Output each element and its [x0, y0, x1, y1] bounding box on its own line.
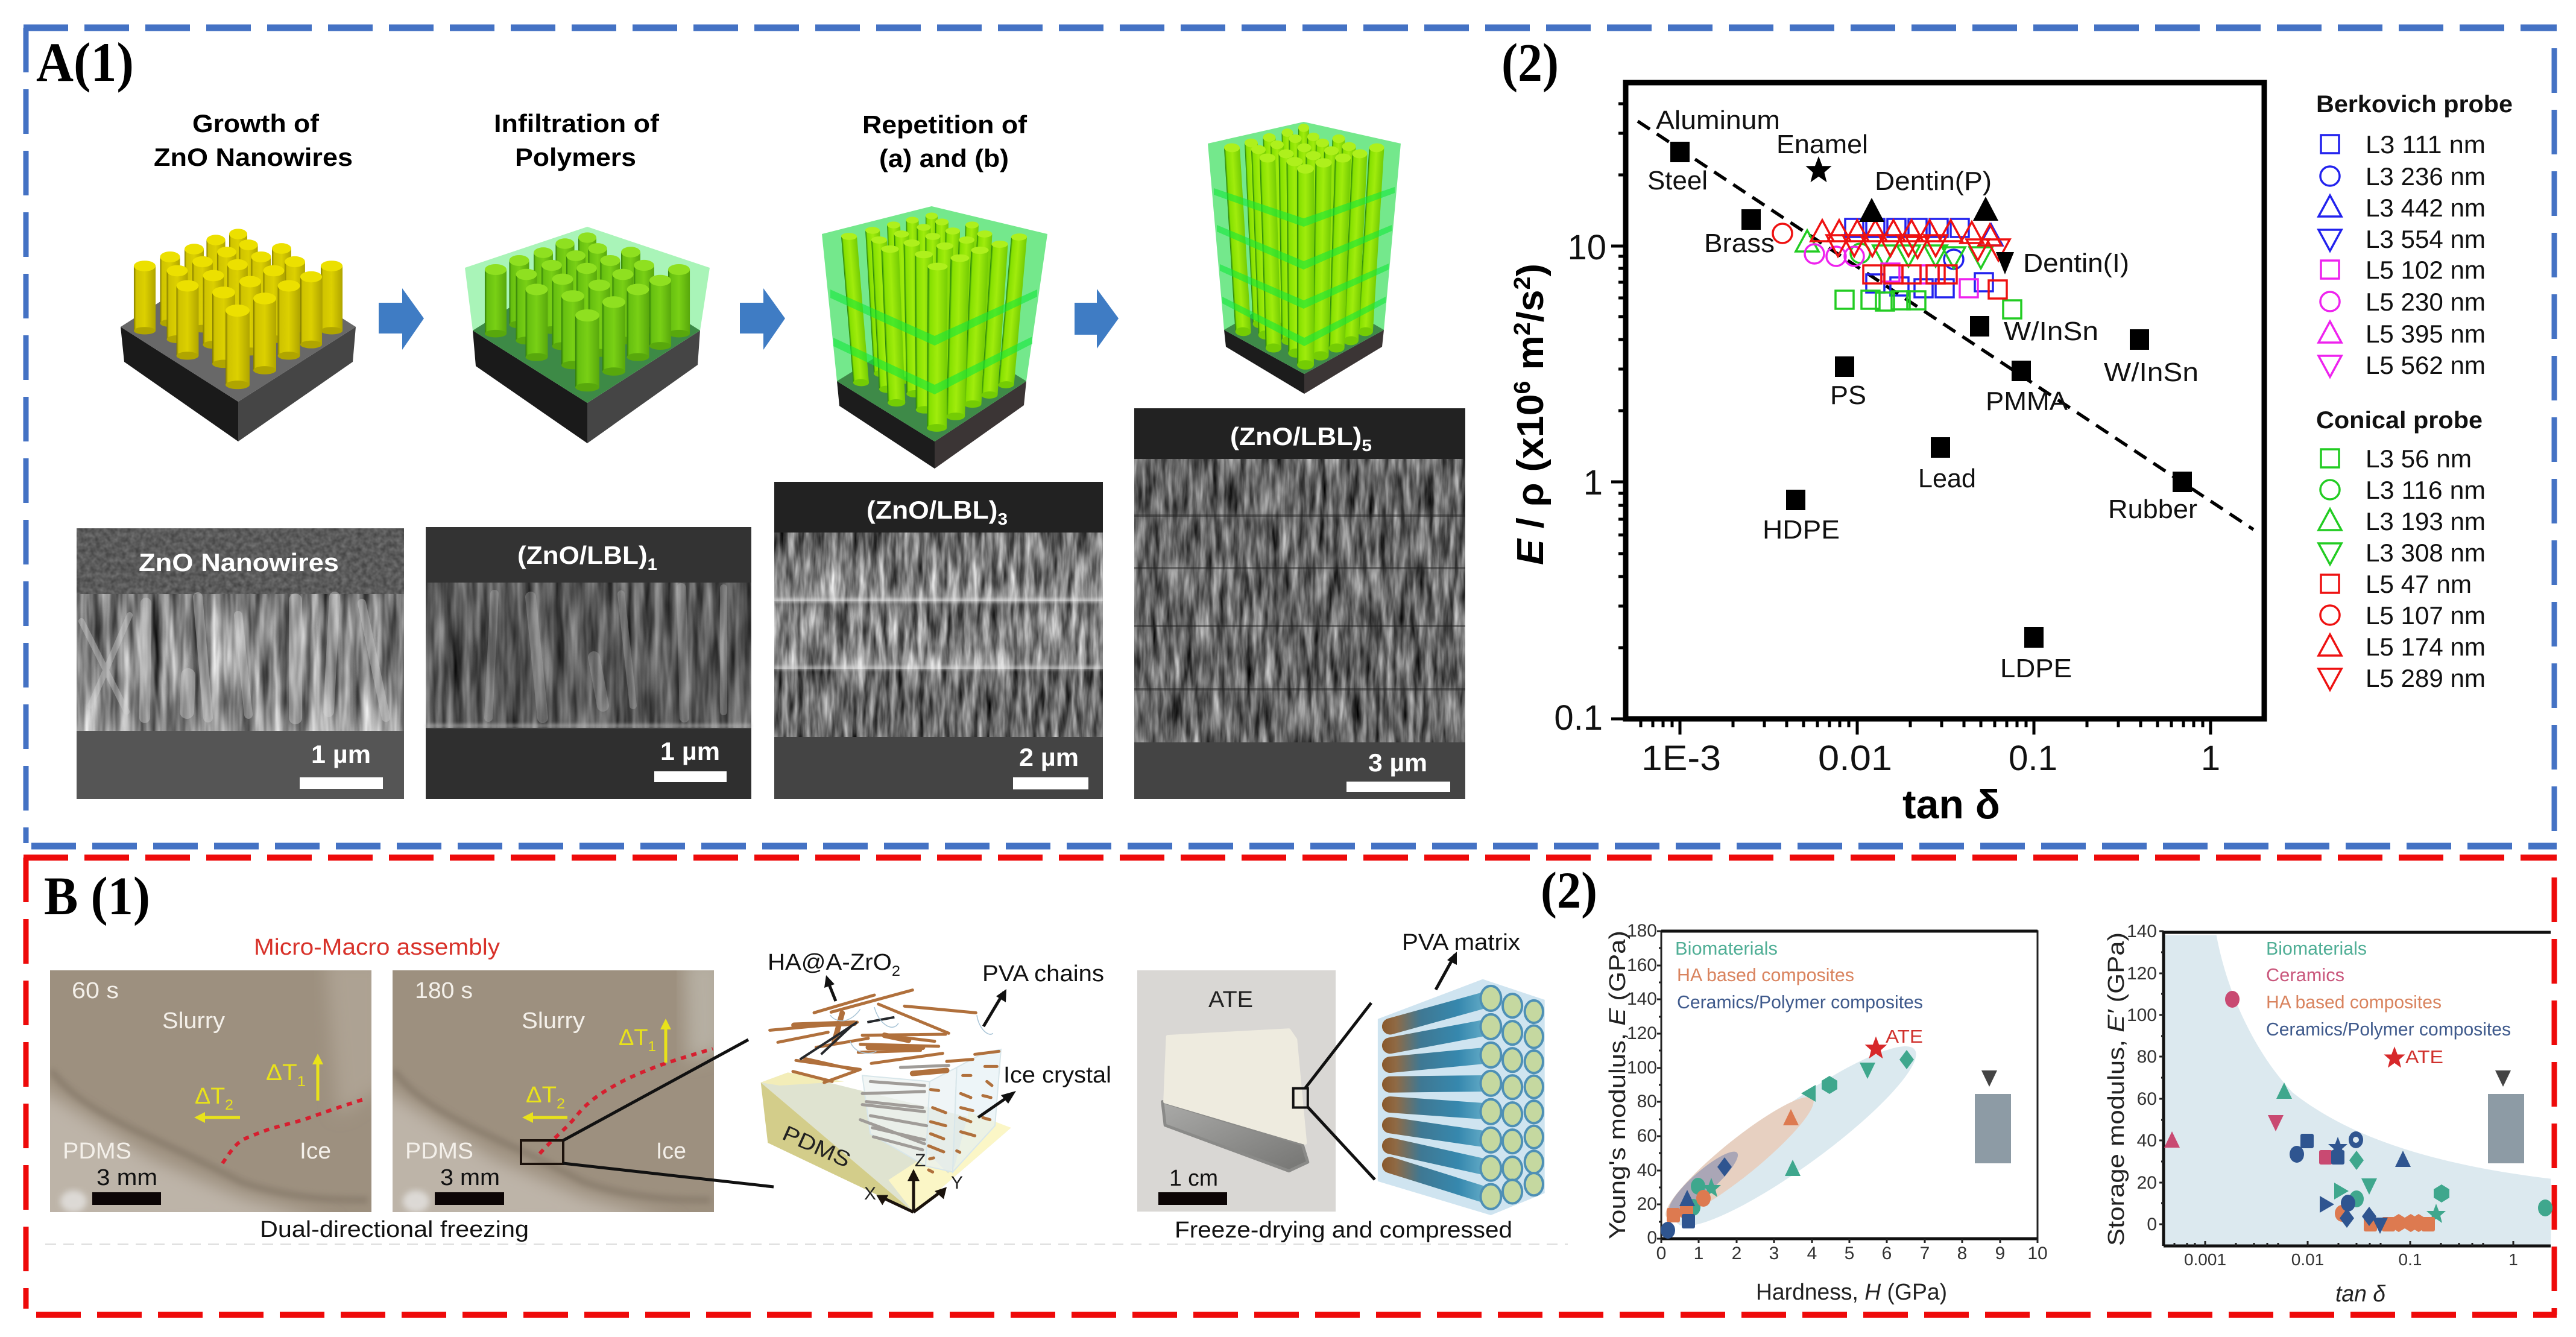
tick labels: 0.1	[2399, 1250, 2422, 1269]
temperature gradient arrows	[522, 1019, 671, 1123]
axis tick labels: 1	[1583, 463, 1603, 502]
tick labels: 7	[1920, 1244, 1930, 1263]
legend: probes: L3 442 nm	[2366, 194, 2486, 222]
legend: probes: L3 56 nm	[2366, 444, 2472, 473]
caption: Dual-directional freezing: Dual-directional freezing	[260, 1217, 529, 1242]
data labels: Enamel	[1776, 130, 1868, 159]
heading: repetition step: (a) and (b)	[879, 144, 1009, 172]
heading: infiltration step: Polymers	[515, 143, 636, 171]
temperature gradient arrows: ΔT	[619, 1025, 648, 1051]
SEM label: (ZnO/LBL)1: 1	[648, 555, 657, 574]
axis tick labels: 0.1	[2009, 739, 2057, 778]
data: reference materials	[1670, 142, 2192, 648]
tick labels: 80	[1637, 1092, 1657, 1111]
red dotted ice front	[223, 1098, 367, 1163]
markers	[2164, 991, 2552, 1234]
scale bar	[1346, 782, 1450, 792]
axis labels: Z	[915, 1151, 926, 1171]
y axis title: )	[1510, 264, 1552, 276]
tick labels: 120	[2127, 964, 2157, 984]
red dotted ice front	[540, 1049, 713, 1154]
scale bar	[654, 771, 727, 782]
legend: Biomaterials	[1675, 938, 1778, 959]
scale: 3 mm	[435, 1165, 504, 1205]
tick labels: 100	[2127, 1005, 2157, 1025]
y axis title: 6	[1510, 381, 1535, 394]
cube: three layers	[822, 206, 1047, 469]
photo labels: PDMS	[405, 1139, 473, 1164]
legend: Ceramics/Polymer composites	[1677, 991, 1923, 1013]
scale label: 1 µm: 1 µm	[311, 740, 371, 768]
callout: HA@A-ZrO2: 2	[892, 963, 900, 979]
axis labels	[864, 1151, 963, 1204]
SEM panel: (ZnO/LBL)3	[774, 482, 1103, 799]
photo labels	[63, 978, 331, 1164]
scale: 3 mm	[92, 1165, 161, 1205]
x axis title: tan δ	[1902, 782, 2000, 827]
tick labels: 20	[1637, 1194, 1657, 1214]
x axis title: Hardness, H (GPa)	[1756, 1280, 1947, 1305]
label: B (1): B (1)	[44, 867, 150, 926]
data labels: Aluminum	[1656, 106, 1780, 135]
y axis title: 2	[1510, 322, 1535, 335]
photo labels: PDMS	[63, 1139, 131, 1164]
label: (2) panel A: (2)	[1501, 33, 1559, 93]
panel frame: B	[24, 858, 2557, 1315]
photo labels: Ice	[656, 1139, 686, 1164]
trend line	[1638, 121, 2253, 529]
schematic: PDMS wedge with rods and ice crystals	[761, 990, 1011, 1212]
legend: probes	[2316, 91, 2513, 692]
callout: PVA matrix: PVA matrix	[1402, 930, 1520, 955]
legend: probes: L3 193 nm	[2366, 507, 2486, 536]
tick labels: 140	[1627, 989, 1657, 1009]
SEM panel: ZnO nanowires	[77, 528, 404, 799]
callout: Ice crystal: Ice crystal	[1003, 1063, 1111, 1088]
arrow: step 1 to 2	[379, 288, 424, 350]
temperature gradient arrows: ΔT	[266, 1060, 295, 1086]
photo: ATE sample	[1137, 970, 1336, 1212]
icon: indenter on pillar	[1975, 1070, 2011, 1163]
legend: HA based composites	[2266, 991, 2442, 1013]
cube: polymer infiltrated	[465, 227, 710, 443]
legend: Biomaterials	[2266, 938, 2367, 959]
y axis title: E / ρ (x10	[1510, 400, 1552, 565]
callout: PVA chains	[982, 961, 1104, 1026]
legend: HA based composites	[1677, 964, 1854, 985]
SEM panel: (ZnO/LBL)1	[426, 527, 751, 799]
y axis title: m	[1510, 335, 1552, 381]
scale: 3 mm: 3 mm	[96, 1165, 157, 1190]
callout: Ice crystal	[978, 1063, 1111, 1117]
data: Berkovich and conical probes cluster	[1773, 219, 2021, 318]
axis tick labels: 1E-3	[1641, 739, 1721, 778]
tick labels: 100	[1627, 1058, 1657, 1078]
legend	[1675, 938, 1923, 1047]
legend: probes: L3 236 nm	[2366, 162, 2486, 191]
tick labels: 3	[1769, 1244, 1779, 1263]
legend: probes: L3 111 nm	[2366, 130, 2486, 159]
legend: probes: L3 554 nm	[2366, 225, 2486, 253]
tick labels: 120	[1627, 1023, 1657, 1043]
chart: E/rho vs tan delta	[1510, 83, 2264, 827]
axis tick labels	[1554, 228, 2220, 778]
regions	[1655, 1025, 1933, 1247]
tick labels: 9	[1995, 1244, 2005, 1263]
callout: PVA chains: PVA chains	[982, 961, 1104, 987]
data labels: PMMA	[1986, 387, 2068, 416]
photo labels: 60 s	[72, 978, 119, 1004]
tick labels: 8	[1957, 1244, 1967, 1263]
label: (2) panel B: (2)	[1541, 861, 1597, 919]
panel frame: A	[24, 28, 2557, 846]
arrow: step 3 to 4	[1075, 289, 1119, 349]
tick labels: 80	[2137, 1047, 2157, 1067]
scale: 3 mm: 3 mm	[440, 1165, 500, 1190]
temperature gradient arrows: 1	[648, 1038, 656, 1055]
photo: 60 s freezing	[24, 959, 386, 1230]
data labels: PS	[1830, 381, 1866, 410]
tick labels: 1	[1694, 1244, 1703, 1263]
data labels: HDPE	[1763, 515, 1840, 545]
temperature gradient arrows: 2	[225, 1097, 233, 1113]
legend: Ceramics/Polymer composites	[2266, 1019, 2511, 1040]
temperature gradient arrows: 1	[297, 1073, 306, 1090]
scale: 1 cm	[1158, 1166, 1227, 1205]
data labels: W/InSn	[2004, 317, 2098, 346]
temperature gradient arrows	[194, 1054, 323, 1123]
arrow: step 2 to 3	[740, 288, 785, 350]
zoom lines to cylinder block	[1305, 1003, 1375, 1180]
shaded region	[2164, 935, 2551, 1247]
y axis title: Storage modulus, E′ (GPa)	[2104, 932, 2129, 1246]
SEM label: (ZnO/LBL)3: 3	[997, 510, 1008, 528]
SEM label: (ZnO/LBL)5: (ZnO/LBL)	[1230, 422, 1354, 450]
data labels: Rubber	[2108, 495, 2197, 524]
heading: infiltration step: Infiltration of	[494, 109, 660, 137]
data labels: Brass	[1704, 229, 1775, 258]
axis tick labels: 10	[1567, 228, 1606, 267]
data labels: LDPE	[2000, 654, 2072, 683]
callout: HA@A-ZrO2	[768, 950, 900, 1001]
legend: probes: L5 174 nm	[2366, 633, 2486, 661]
wedge label: PDMS: PDMS	[779, 1120, 854, 1172]
legend	[2266, 938, 2511, 1067]
legend: probes: L3 116 nm	[2366, 476, 2486, 504]
legend heading: Conical: Conical probe	[2316, 407, 2483, 434]
tick labels	[2127, 921, 2518, 1269]
markers	[1661, 1036, 1914, 1239]
photo labels: Slurry	[162, 1008, 225, 1034]
faint separator	[45, 1244, 1568, 1245]
tick labels: 0	[1656, 1244, 1666, 1263]
tick labels: 40	[2137, 1131, 2157, 1151]
data labels: Steel	[1647, 166, 1708, 195]
axis labels: Y	[951, 1173, 963, 1193]
legend: probes: L5 289 nm	[2366, 664, 2486, 692]
SEM panel: (ZnO/LBL)5	[1134, 408, 1465, 799]
scale bar	[1013, 777, 1088, 789]
legend heading: Berkovich: Berkovich probe	[2316, 91, 2513, 118]
callout: PVA matrix	[1402, 930, 1520, 990]
tick labels: 0	[1647, 1228, 1657, 1248]
heading: repetition step: Repetition of	[862, 110, 1028, 139]
legend: probes: L5 107 nm	[2366, 601, 2486, 630]
tick labels: 2	[1732, 1244, 1741, 1263]
photo labels	[405, 978, 686, 1164]
tick labels: 1	[2508, 1250, 2518, 1269]
legend: ATE	[2405, 1046, 2443, 1067]
legend: ATE	[1886, 1026, 1923, 1047]
caption: Freeze-drying and compressed: Freeze-drying and compressed	[1175, 1218, 1512, 1243]
scale: 1 cm: 1 cm	[1169, 1166, 1218, 1191]
chart: Young's modulus vs hardness	[1605, 921, 2048, 1305]
label: A(1): A(1)	[36, 31, 134, 93]
photo labels: 180 s	[415, 978, 473, 1004]
temperature gradient arrows: ΔT	[526, 1083, 555, 1108]
legend: probes: L5 230 nm	[2366, 288, 2486, 316]
legend: probes: L5 395 nm	[2366, 320, 2486, 348]
heading: repetition step	[862, 110, 1028, 172]
zoom box	[521, 1140, 563, 1164]
photo labels: Ice	[300, 1139, 331, 1164]
scale label: 1 µm: 1 µm	[660, 737, 720, 765]
data labels: Dentin(P)	[1875, 166, 1992, 196]
SEM label: (ZnO/LBL)1: (ZnO/LBL)	[517, 541, 641, 569]
SEM label: ZnO Nanowires: ZnO Nanowires	[139, 548, 339, 577]
heading: growth step: Growth of	[192, 109, 320, 137]
tick labels: 4	[1807, 1244, 1817, 1263]
tick labels: 40	[1637, 1160, 1657, 1180]
scale label: 3 µm: 3 µm	[1368, 748, 1427, 777]
heading: growth step	[154, 109, 353, 171]
heading: infiltration step	[494, 109, 660, 171]
heading: growth step: ZnO Nanowires	[154, 143, 353, 171]
y axis title: Young's modulus, E (GPa)	[1605, 931, 1631, 1239]
legend: probes: L5 102 nm	[2366, 256, 2486, 284]
axis labels: X	[864, 1184, 876, 1204]
tick labels: 5	[1845, 1244, 1854, 1263]
tick labels	[1627, 921, 2048, 1263]
photo: 180 s freezing	[367, 959, 724, 1230]
axis tick labels: 0.01	[1818, 739, 1892, 778]
data labels: Dentin(I)	[2023, 248, 2129, 278]
callout: HA@A-ZrO2: HA@A-ZrO	[768, 950, 885, 975]
SEM label: (ZnO/LBL)5: 5	[1362, 436, 1372, 455]
legend: probes: L5 562 nm	[2366, 351, 2486, 379]
tick labels: 10	[2027, 1244, 2048, 1263]
axis tick labels: 0.1	[1554, 698, 1603, 738]
x axis title: tan δ	[2335, 1282, 2386, 1307]
SEM label: (ZnO/LBL)3: (ZnO/LBL)	[867, 496, 990, 524]
cube: five layers	[1208, 122, 1401, 394]
zoom lines to schematic	[563, 1040, 774, 1187]
temperature gradient arrows: 2	[557, 1096, 565, 1112]
icon: indenter on pillar	[2488, 1070, 2524, 1163]
y axis title: /s	[1510, 289, 1552, 322]
tick labels: 0	[2147, 1215, 2157, 1234]
cube: ZnO nanowires	[121, 229, 356, 441]
tick labels: 180	[1627, 921, 1657, 941]
tick labels: 6	[1882, 1244, 1892, 1263]
scale bar	[300, 777, 383, 789]
legend: probes: L5 47 nm	[2366, 570, 2472, 598]
axis tick labels: 1	[2201, 739, 2220, 778]
tick labels: 20	[2137, 1173, 2157, 1193]
tick labels: 0.01	[2291, 1250, 2324, 1269]
tick labels: 60	[2137, 1089, 2157, 1109]
legend: probes: L3 308 nm	[2366, 539, 2486, 567]
scale label: 2 µm: 2 µm	[1019, 743, 1079, 771]
sample label: ATE: ATE	[1208, 987, 1253, 1013]
tick labels: 0.001	[2184, 1250, 2226, 1269]
schematic: aligned cylinder block	[1378, 979, 1545, 1215]
heading: Micro-Macro assembly: Micro-Macro assembly	[254, 935, 500, 960]
data labels: Lead	[1918, 464, 1976, 493]
legend: Ceramics	[2266, 964, 2344, 985]
chart: storage modulus vs tan delta	[2104, 921, 2552, 1307]
data labels: W/InSn	[2104, 358, 2199, 387]
tick labels: 160	[1627, 955, 1657, 975]
tick labels: 60	[1637, 1126, 1657, 1146]
data labels	[1647, 106, 2199, 683]
tick labels: 140	[2127, 921, 2157, 941]
y axis title: 2	[1510, 276, 1535, 289]
temperature gradient arrows: ΔT	[195, 1084, 224, 1109]
photo labels: Slurry	[522, 1008, 585, 1034]
